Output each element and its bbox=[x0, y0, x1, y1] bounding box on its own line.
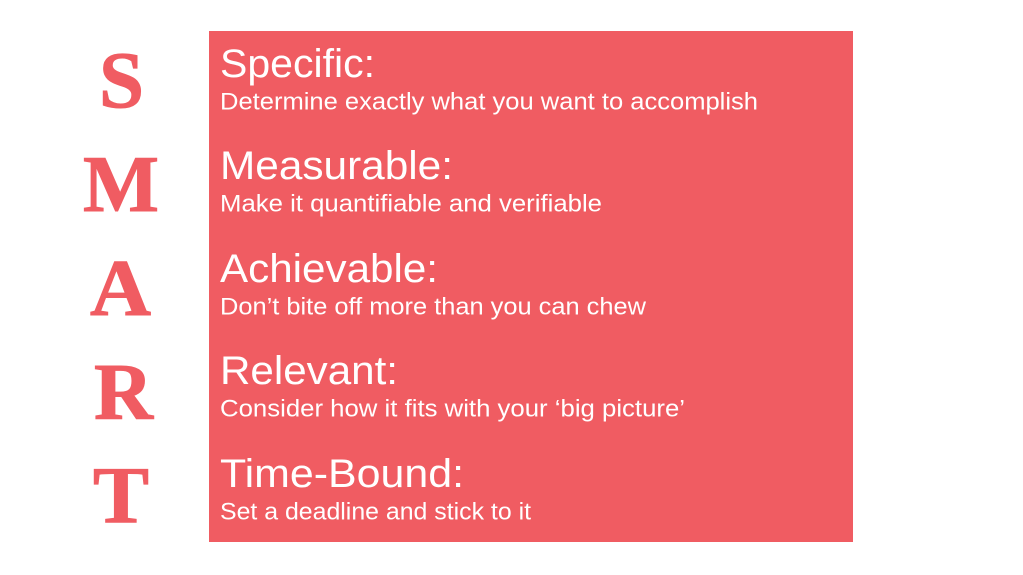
item: Achievable: Don’t bite off more than you can chew bbox=[220, 294, 647, 320]
item: Measurable: Measurable: bbox=[220, 144, 453, 188]
letter A: A bbox=[90, 243, 151, 333]
item: Measurable: Make it quantifiable and verifiable bbox=[220, 190, 602, 218]
item: Relevant: Consider how it fits with your ‘big picture’ bbox=[220, 396, 685, 422]
item: Measurable bbox=[220, 144, 602, 218]
item: Relevant: Relevant: bbox=[220, 349, 398, 393]
letter S: S bbox=[99, 35, 144, 125]
item: Specific bbox=[220, 42, 758, 116]
panel: red background bbox=[209, 31, 853, 542]
item: Specific: Specific: bbox=[220, 42, 375, 86]
item: Time-Bound: Time-Bound: bbox=[220, 452, 464, 496]
item: Achievable bbox=[220, 247, 647, 320]
item: Achievable: Achievable: bbox=[220, 247, 438, 291]
letter T: T bbox=[93, 450, 149, 540]
letter R: R bbox=[94, 347, 155, 437]
letter column: SMART bbox=[83, 35, 159, 540]
item: Relevant bbox=[220, 349, 685, 422]
letter M: M bbox=[83, 139, 159, 229]
item: Specific: Determine exactly what you want to accomplish bbox=[220, 88, 758, 116]
item: Time-Bound: Set a deadline and stick to it bbox=[220, 498, 531, 526]
item: Time-Bound bbox=[220, 452, 531, 526]
